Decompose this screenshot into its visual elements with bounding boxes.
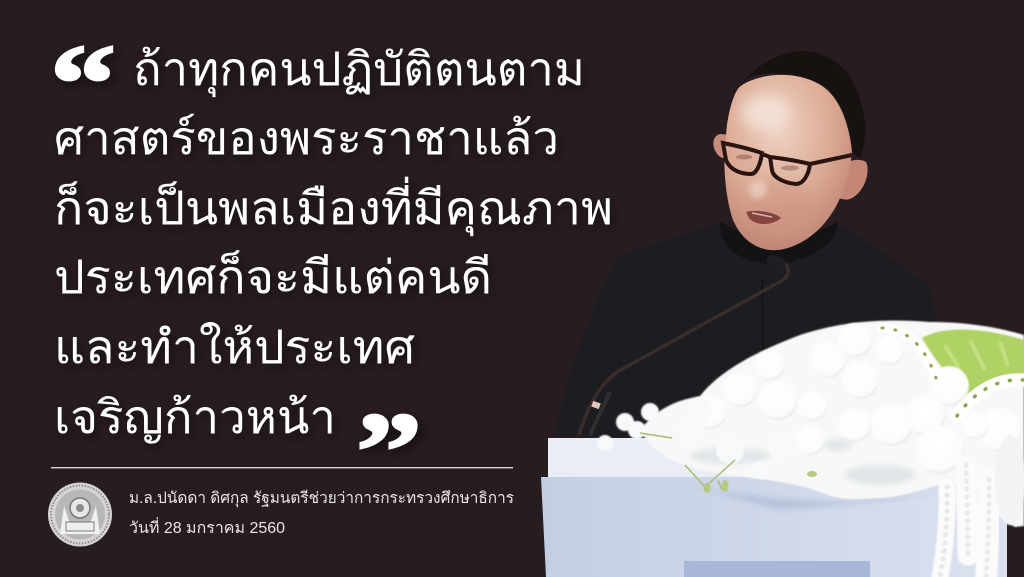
orchid stems: [640, 433, 735, 490]
hair: [728, 51, 865, 158]
quote line 2: ศาสตร์ของพระราชาแล้ว: [54, 112, 559, 164]
quote text block: [50, 23, 613, 512]
icon: ministry emblem seal: [48, 482, 112, 546]
date: วันที่ 28 มกราคม 2560: [129, 517, 285, 537]
speaker name and title: ม.ล.ปนัดดา ดิศกุล รัฐมนตรีช่วยว่าการกระทรวงศึกษาธิการ: [129, 490, 514, 508]
eyes: [736, 154, 799, 170]
left ear: [713, 134, 732, 158]
quote line 4: ประเทศก็จะมีแต่คนดี: [54, 250, 492, 303]
icon: opening quotation mark: “: [50, 23, 116, 144]
head: [713, 51, 868, 250]
microphone: [579, 252, 788, 435]
garlands: [940, 465, 989, 577]
quote line 6: เจริญก้าวหน้า: [54, 391, 336, 443]
icon: closing quotation mark: ”: [356, 391, 422, 512]
flower arrangement: [597, 321, 1024, 577]
quote line 5: และทำให้ประเทศ: [54, 321, 415, 373]
glasses: [723, 143, 852, 184]
podium plate: [684, 561, 870, 577]
beaded garland arcs: [882, 328, 1024, 416]
buds: [704, 471, 817, 493]
quote line 3: ก็จะเป็นพลเมืองที่มีคุณภาพ: [54, 176, 613, 237]
green chrysanthemum: [922, 330, 1024, 398]
right ear: [838, 160, 868, 200]
right-edge flowers: [995, 435, 1024, 525]
soft flower shadows: [690, 439, 915, 485]
green highlights: [945, 340, 1008, 370]
photo: speaker at podium: [541, 51, 1024, 577]
attribution: [129, 490, 514, 537]
face: [724, 75, 852, 250]
jacket: [555, 222, 936, 440]
podium: [541, 438, 1007, 577]
divider: [51, 467, 513, 468]
orchid sprays: [597, 398, 793, 479]
white roses and pompoms: [693, 323, 1022, 474]
mouth: [746, 211, 781, 224]
quote line 1: ถ้าทุกคนปฏิบัติตนตาม: [133, 43, 585, 98]
